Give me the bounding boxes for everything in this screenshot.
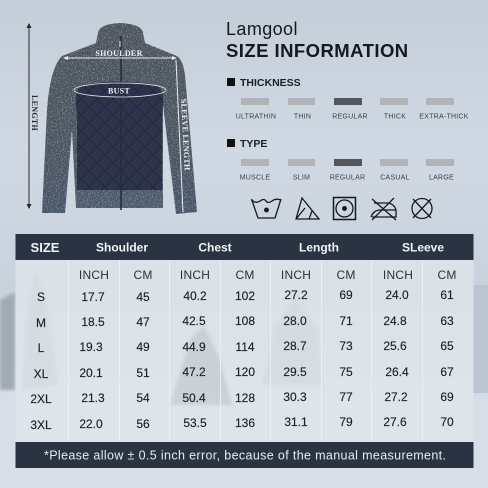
tree in table background [170,325,232,405]
sleeve length measure: SLEEVE LENGTH [179,99,192,171]
type scale: LARGE [429,174,454,182]
unit headings: INCH [281,268,311,282]
row S: 24.0 [385,288,409,302]
shoulder measure [63,41,177,60]
thickness scale: ULTRATHIN [236,114,276,120]
row L: 49 [136,340,150,354]
row 2XL: 69 [440,390,454,404]
title [226,19,409,61]
row M: M [36,316,46,330]
row 2XL: 21.3 [81,391,105,405]
thickness scale: REGULAR [332,114,368,120]
type scale: REGULAR [330,174,365,182]
unit headings: INCH [383,268,413,282]
row 3XL: 136 [235,416,255,430]
table header [16,234,474,260]
thickness scale: EXTRA-THICK [419,114,469,120]
panel: type [227,138,454,182]
row 3XL: 3XL [30,418,52,432]
unit headings: CM [437,268,457,282]
icon: wash tub [252,199,281,218]
row S: 17.7 [81,290,105,304]
title: SIZE INFORMATION [226,40,409,61]
row L: L [38,341,45,355]
unit headings: CM [336,268,356,282]
row S: 61 [440,288,454,302]
row XL: XL [34,367,49,381]
unit headings: INCH [79,268,109,282]
table body [16,260,474,442]
row XL: 29.5 [283,365,307,379]
zipper [120,36,122,210]
row M: 18.5 [81,315,105,329]
row XL: 120 [235,365,255,379]
jacket sleeves and knit yoke [42,23,197,214]
row L: 65 [440,339,454,353]
row 3XL: 70 [440,415,454,429]
jacket with measurement marks [26,23,197,214]
row S: 102 [235,289,255,303]
footer note [16,442,474,468]
length measure [26,23,39,209]
shoulder measure: SHOULDER [95,49,143,58]
bust measure: BUST [108,86,130,96]
panel: size table [16,234,474,468]
row XL: 20.1 [79,366,103,380]
unit headings: INCH [180,268,210,282]
heading: type [227,138,267,150]
row S: 27.2 [284,288,308,302]
table header: Shoulder [96,240,148,254]
table header: SIZE [31,240,60,255]
row L: 19.3 [79,340,103,354]
row S [37,288,454,304]
icon: tumble dry [334,198,356,220]
row XL: 47.2 [182,365,206,379]
footer note: *Please allow ± 0.5 inch error, because of the manual measurement. [44,448,446,462]
row XL: 75 [339,365,353,379]
row 3XL: 22.0 [79,417,103,431]
thickness scale [236,98,469,120]
row XL: 51 [136,366,150,380]
row S: 40.2 [183,289,207,303]
length measure: LENGTH [30,95,39,132]
row M: 42.5 [182,314,206,328]
unit headings: CM [235,268,255,282]
panel: thickness [227,77,469,120]
thickness scale: THIN [294,114,311,120]
row XL: 26.4 [385,365,409,379]
tree in table background [22,270,58,390]
type scale [240,159,454,182]
icon: bleach triangle [296,198,319,219]
row M: 28.0 [283,314,307,328]
icon: do not dry clean [412,198,432,218]
row M: 47 [136,315,150,329]
type scale: CASUAL [380,174,410,182]
row 2XL: 50.4 [182,391,206,405]
row L: 28.7 [283,339,307,353]
care icons [252,198,432,220]
row 2XL: 54 [136,391,150,405]
row 3XL: 56 [136,417,150,431]
column dividers [68,260,422,442]
unit headings: CM [133,268,153,282]
sleeve length measure [176,60,192,212]
row L: 44.9 [182,340,206,354]
row L: 73 [339,339,353,353]
row 2XL: 27.2 [384,390,408,404]
row S: 45 [136,290,150,304]
jacket quilted body panel [76,82,163,190]
row M [36,314,454,330]
table header: SLeeve [402,240,444,254]
row L [38,339,454,355]
type scale: SLIM [293,174,310,182]
heading: thickness: THICKNESS [240,77,301,89]
row 2XL: 128 [235,391,255,405]
title: Lamgool [226,19,298,39]
row 2XL: 77 [339,390,353,404]
thickness scale: THICK [384,114,406,120]
row 2XL: 2XL [30,392,52,406]
row XL [34,365,454,381]
type scale: MUSCLE [240,174,270,182]
row 3XL: 31.1 [284,415,308,429]
row L: 114 [235,340,255,354]
heading: type: TYPE [240,138,267,150]
row 3XL: 27.6 [383,415,407,429]
row 3XL: 79 [339,415,353,429]
table header: Length [299,240,339,254]
row L: 25.6 [383,339,407,353]
tree in table background [262,295,322,385]
icon: do not iron [371,198,396,220]
row M: 24.8 [383,314,407,328]
table header: Chest [198,240,232,254]
row S: 69 [339,288,353,302]
jacket hem ribbing [76,190,163,208]
row 3XL: 53.5 [183,416,207,430]
row S: S [37,290,45,304]
row 3XL [30,415,454,432]
bust measure [74,83,166,97]
row M: 108 [235,314,255,328]
row M: 63 [440,314,454,328]
row 2XL [30,390,454,406]
unit headings [79,268,457,282]
row 2XL: 30.3 [283,390,307,404]
row XL: 67 [440,365,454,379]
row M: 71 [339,314,353,328]
